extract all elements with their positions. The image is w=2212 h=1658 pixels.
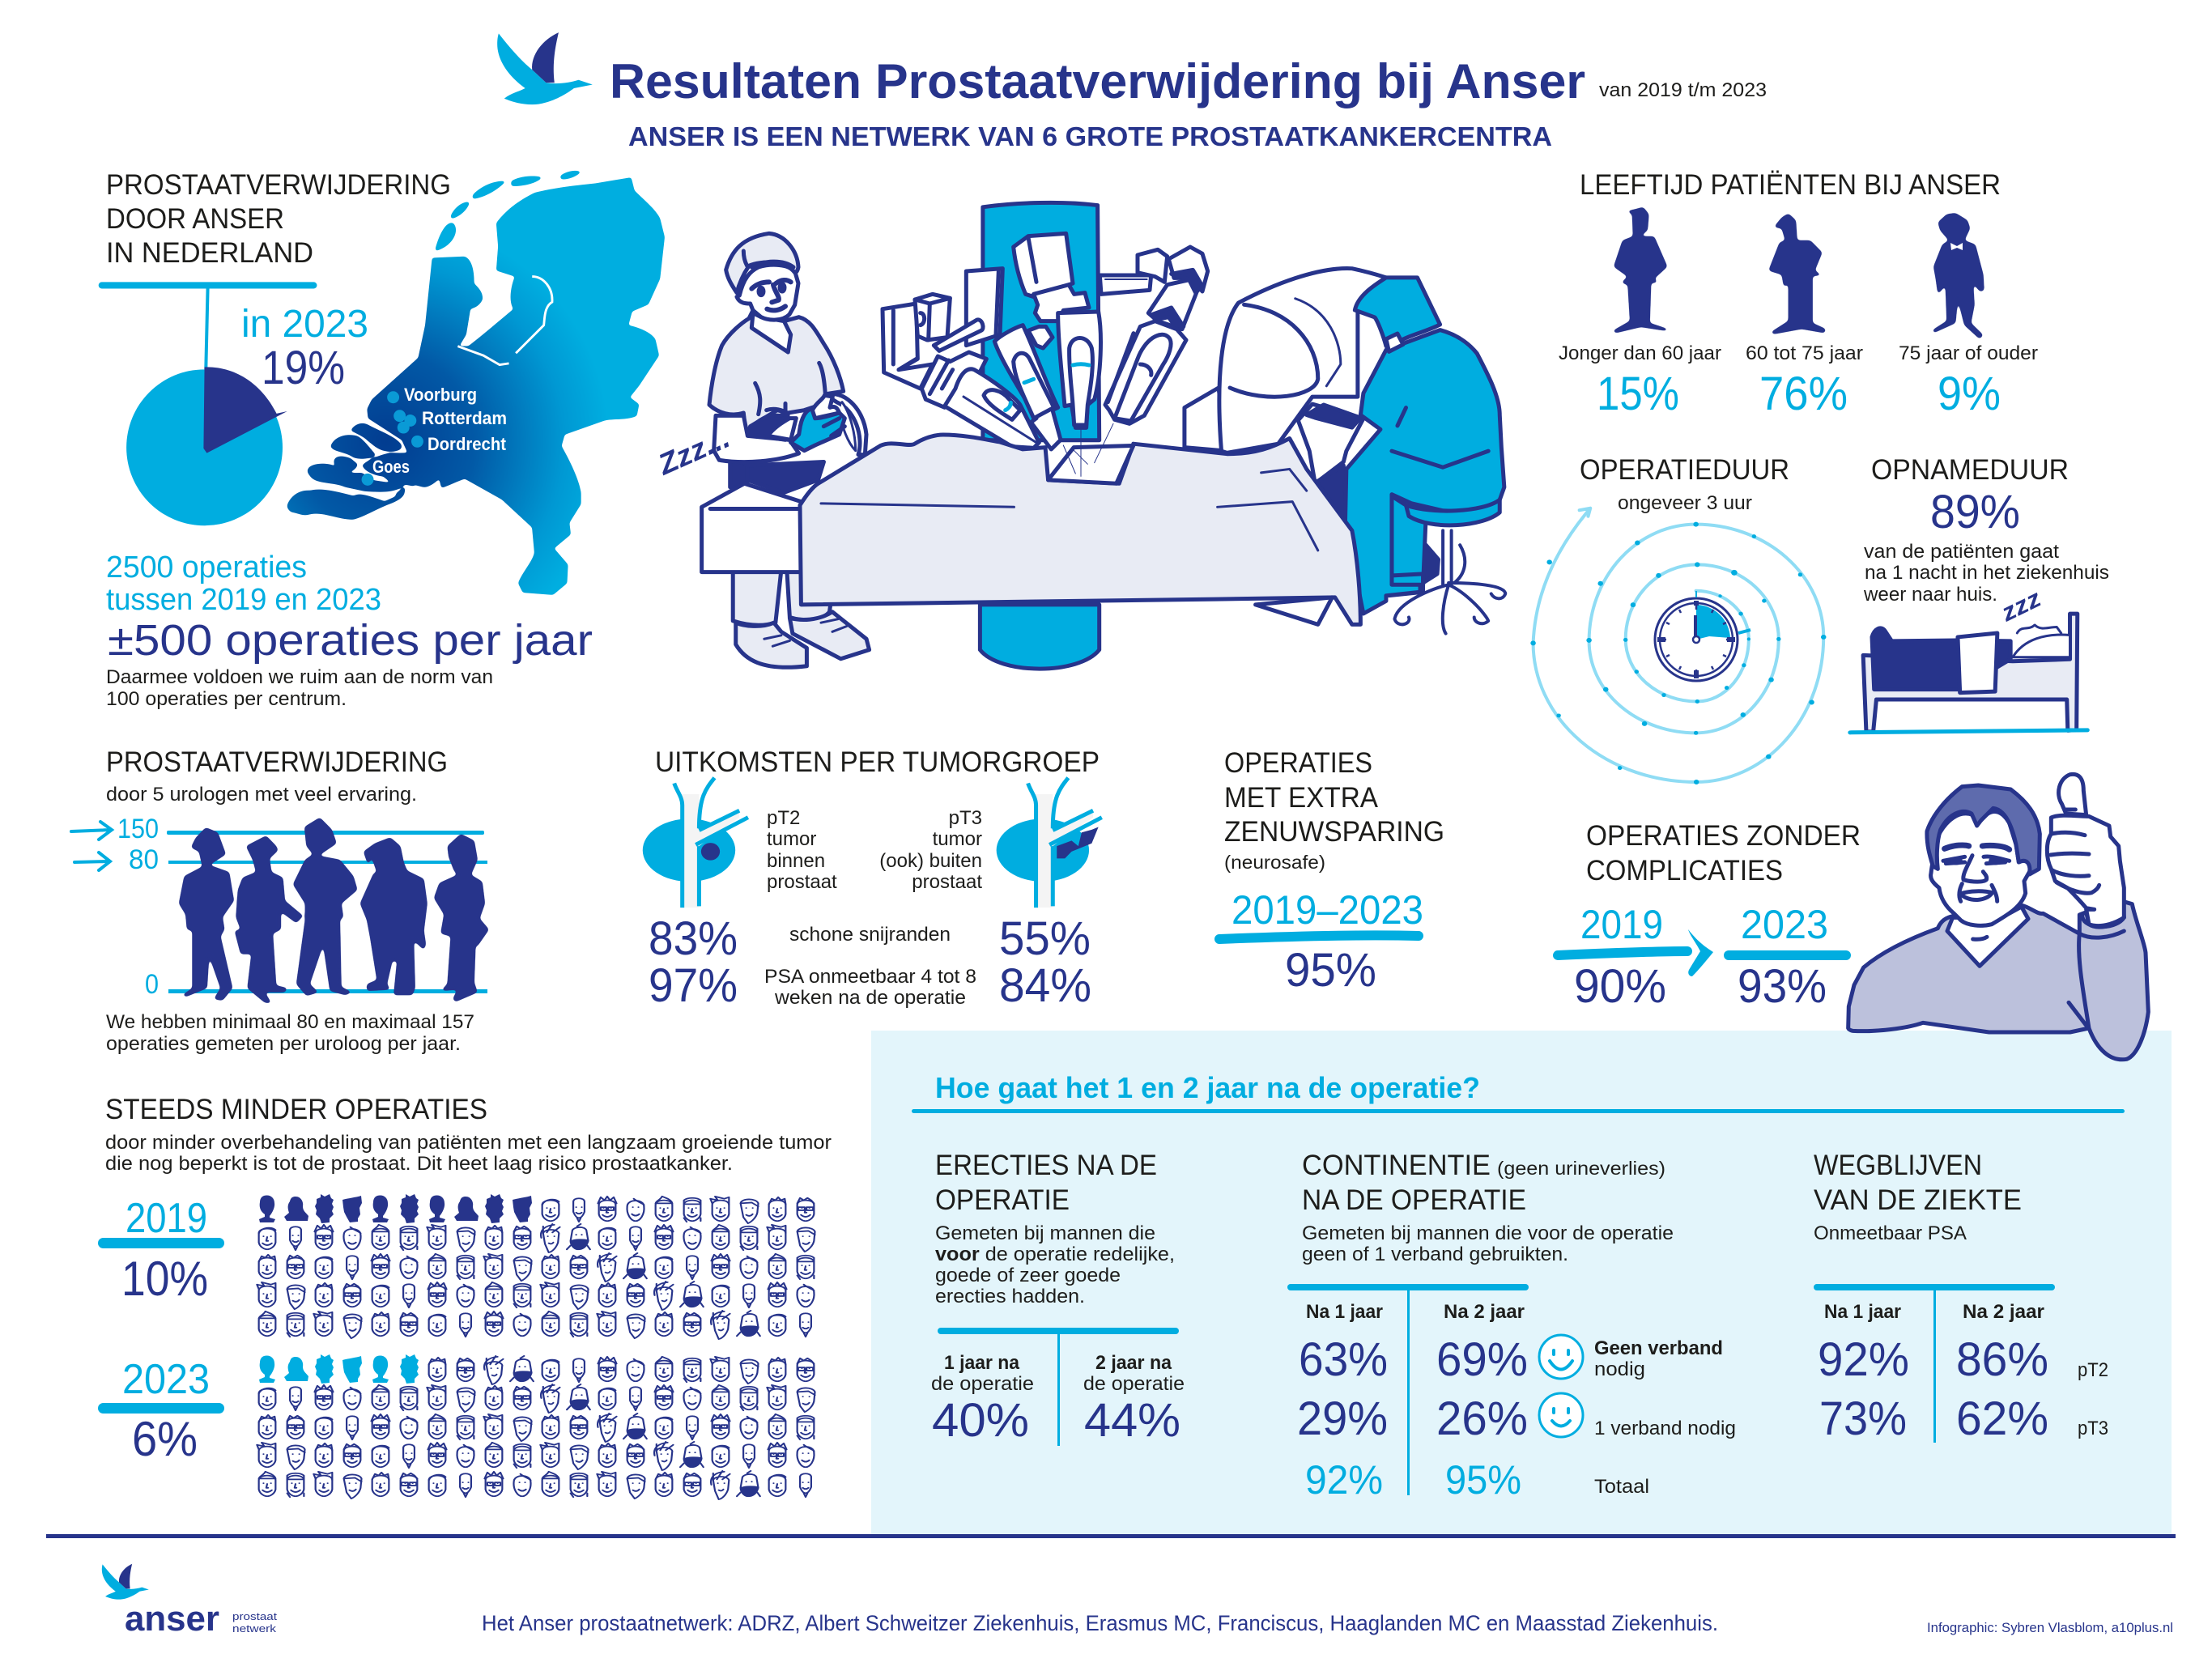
footer logo subtitle: prostaat	[232, 1610, 277, 1622]
pT2 label: prostaat	[767, 871, 837, 893]
footer logo subtitle	[232, 1610, 277, 1635]
heading: OPERATIES ZONDER	[1586, 820, 1861, 852]
map labels: Goes	[372, 457, 410, 477]
column labels	[931, 1352, 1185, 1395]
panel: staying free of disease	[1814, 1150, 2108, 1445]
footer rule	[46, 1534, 2176, 1538]
values	[932, 1394, 1180, 1447]
footer logo wordmark: anser	[125, 1599, 219, 1639]
value: 89%	[1930, 486, 2020, 538]
panel: prostatectomy in the Netherlands	[99, 169, 665, 710]
note: We hebben minimaal 80 en maximaal 157	[106, 1011, 474, 1033]
period: 2019–2023	[1231, 887, 1423, 933]
column labels: Na 2 jaar	[1444, 1301, 1525, 1323]
outcome values: 84%	[999, 959, 1091, 1012]
heading	[1302, 1150, 1526, 1216]
description: door minder overbehandeling van patiënten met een langzaam groeiende tumor	[105, 1132, 832, 1154]
icon: bow tie	[1950, 243, 1963, 250]
back layer: column, console, surgeon, stool, nurse legs	[730, 202, 1505, 669]
map labels: Rotterdam	[422, 408, 507, 428]
operations per year: ±500 operaties per jaar	[108, 616, 593, 665]
surgeon	[1298, 278, 1504, 614]
scale labels	[117, 814, 159, 1000]
footer logo subtitle: netwerk	[232, 1622, 277, 1635]
tumour labels: pT3	[2078, 1418, 2108, 1439]
panel: admission duration	[1850, 454, 2109, 733]
values: 69%	[1436, 1333, 1528, 1386]
heading: UITKOMSTEN PER TUMORGROEP	[655, 746, 1100, 778]
total values: 92%	[1305, 1457, 1383, 1503]
icon: small smiley	[1539, 1393, 1583, 1437]
nurse legs	[730, 451, 870, 667]
description: goede of zeer goede	[935, 1265, 1121, 1286]
icon: five urologists silhouettes	[179, 818, 489, 1003]
footer	[46, 1534, 2176, 1639]
network line: Het Anser prostaatnetwerk: ADRZ, Albert Schweitzer Ziekenhuis, Erasmus MC, Franciscus, Haaglanden MC en Maasstad Ziekenhuis.	[482, 1611, 1718, 1635]
subheading: door 5 urologen met veel ervaring.	[106, 784, 417, 806]
values: 73%	[1819, 1392, 1907, 1445]
description: voor de operatie redelijke,	[935, 1244, 1175, 1265]
values	[1818, 1333, 2048, 1445]
credit: Infographic: Sybren Vlasblom, a10plus.nl	[1927, 1620, 2173, 1635]
heading	[106, 169, 451, 269]
heading: VAN DE ZIEKTE	[1814, 1184, 2022, 1216]
title: Resultaten Prostaatverwijdering bij Anser	[610, 54, 1585, 108]
pie chart: 19 percent in 2023	[99, 282, 317, 525]
outcome values: 97%	[649, 959, 738, 1012]
panel: outcomes per tumour group	[643, 746, 1102, 1012]
note: operaties gemeten per uroloog per jaar.	[106, 1033, 461, 1055]
description: erecties hadden.	[935, 1286, 1085, 1307]
values: 26%	[1436, 1392, 1528, 1445]
age values	[1597, 368, 2001, 420]
pT3 label: (ook) buiten	[879, 850, 982, 872]
values: 90%	[1574, 960, 1666, 1013]
column labels: Na 2 jaar	[1963, 1301, 2044, 1323]
heading: OPERATIEDUUR	[1580, 454, 1789, 486]
operations count text	[106, 551, 381, 617]
total values	[1305, 1457, 1521, 1503]
2019 bar	[98, 1238, 224, 1248]
sleeping zzz: zzz	[1997, 585, 2045, 627]
bar and stem	[1287, 1284, 1529, 1495]
values: 92%	[1818, 1333, 1909, 1386]
heading: OPERATIES	[1224, 747, 1372, 779]
scale labels: 0	[145, 969, 159, 1000]
norm text: 100 operaties per centrum.	[106, 688, 347, 710]
map labels: Voorburg	[404, 385, 477, 405]
column labels: Na 1 jaar	[1306, 1301, 1383, 1323]
age labels: Jonger dan 60 jaar	[1559, 342, 1721, 364]
legends: nodig	[1594, 1358, 1645, 1380]
legends: Totaal	[1594, 1476, 1649, 1498]
outcome labels: weken na de operatie	[774, 987, 966, 1009]
column labels	[1306, 1301, 1525, 1323]
nurse upper body	[709, 233, 866, 462]
pT3 label: tumor	[933, 828, 982, 850]
description: geen of 1 verband gebruikten.	[1302, 1244, 1568, 1265]
norm text: Daarmee voldoen we ruim aan de norm van	[106, 666, 493, 688]
map of the Netherlands	[287, 171, 665, 595]
pT2 label: tumor	[767, 828, 816, 850]
heading	[1586, 820, 1861, 886]
2019 year: 2019	[125, 1195, 207, 1242]
panel: light blue follow-up background	[871, 1031, 2172, 1535]
norm text	[106, 666, 493, 710]
illustration: robotic surgery scene	[702, 202, 1505, 669]
panel: follow-up heading	[912, 1071, 2125, 1113]
age values: 15%	[1597, 368, 1679, 420]
panel: operations without complications	[1558, 820, 1861, 1013]
pie label year: in 2023	[241, 303, 368, 346]
heading: DOOR ANSER	[106, 203, 284, 235]
heading: ZENUWSPARING	[1224, 816, 1444, 848]
age labels: 60 tot 75 jaar	[1746, 342, 1863, 364]
pT3 label: pT3	[949, 807, 982, 829]
description	[1302, 1222, 1674, 1265]
values	[1574, 960, 1827, 1013]
robot column	[980, 202, 1100, 669]
heading: PROSTAATVERWIJDERING	[106, 169, 451, 201]
heading: WEGBLIJVEN	[1814, 1150, 1982, 1181]
panel: erections after surgery	[931, 1150, 1185, 1447]
arrow chevron	[1688, 929, 1713, 976]
icon: three men silhouettes	[1612, 207, 1984, 339]
map labels: Dordrecht	[428, 434, 507, 454]
operations count text: 2500 operaties	[106, 551, 307, 585]
values	[1297, 1333, 1528, 1445]
pictogram: 2023 patients	[257, 1354, 815, 1499]
values: 40%	[932, 1394, 1029, 1447]
heading: COMPLICATIES	[1586, 855, 1783, 886]
scale labels: 80	[129, 844, 159, 875]
outcome values: 55%	[999, 912, 1091, 965]
heading	[935, 1150, 1157, 1216]
age labels	[1559, 342, 2038, 364]
tumour labels: pT2	[2078, 1359, 2108, 1381]
values: 93%	[1738, 960, 1827, 1013]
column labels	[1824, 1301, 2044, 1323]
outcome labels: schone snijranden	[789, 924, 951, 946]
text: van de patiënten gaat	[1864, 541, 2059, 563]
description: Onmeetbaar PSA	[1814, 1222, 1967, 1244]
column labels: 2 jaar na	[1095, 1352, 1172, 1374]
bar and stem	[1814, 1284, 2055, 1443]
panel: continence after surgery	[1287, 1150, 1736, 1503]
panel: operation duration	[1530, 454, 1826, 784]
map labels	[372, 385, 507, 477]
age values: 9%	[1938, 368, 2001, 420]
heading: PROSTAATVERWIJDERING	[106, 746, 448, 778]
scale labels: 150	[117, 814, 159, 844]
heading: NA DE OPERATIE	[1302, 1184, 1526, 1216]
outcome values	[649, 912, 1091, 1012]
bar and stem	[938, 1328, 1179, 1446]
duration text: ongeveer 3 uur	[1618, 492, 1752, 514]
column labels: de operatie	[931, 1373, 1034, 1395]
operations count text: tussen 2019 en 2023	[106, 583, 381, 617]
icon: big smiley	[1539, 1335, 1583, 1379]
pT2 label	[767, 807, 837, 893]
icon: prostate with pT2 tumour	[643, 778, 748, 908]
spiral around clock	[1530, 508, 1826, 784]
value: 95%	[1285, 944, 1376, 997]
note	[106, 1011, 474, 1055]
values: 86%	[1956, 1333, 2048, 1386]
robot arms	[883, 233, 1208, 449]
age labels: 75 jaar of ouder	[1899, 342, 2038, 364]
heading: OPERATIE	[935, 1184, 1070, 1216]
text: na 1 nacht in het ziekenhuis	[1865, 562, 2109, 584]
description: Gemeten bij mannen die	[935, 1222, 1155, 1244]
icon: clock	[1655, 591, 1750, 681]
arrow 80	[74, 852, 110, 870]
outcome values: 83%	[649, 912, 738, 965]
neurosafe: (neurosafe)	[1224, 852, 1325, 873]
description	[935, 1222, 1175, 1307]
header: logo and title	[497, 32, 1767, 151]
2019 value: 10%	[121, 1252, 208, 1306]
heading: CONTINENTIE	[1302, 1150, 1491, 1181]
years	[1580, 902, 1828, 947]
tumour labels	[2078, 1359, 2108, 1439]
description: die nog beperkt is tot de prostaat. Dit heet laag risico prostaatkanker.	[105, 1153, 733, 1175]
2023 bar	[98, 1403, 224, 1414]
illustration: man giving thumbs up	[1848, 774, 2148, 1060]
heading: LEEFTIJD PATIËNTEN BIJ ANSER	[1580, 169, 2001, 201]
panel: fewer operations	[98, 1094, 832, 1499]
years: 2019	[1580, 902, 1663, 947]
heading: STEEDS MINDER OPERATIES	[105, 1094, 487, 1125]
years: 2023	[1741, 902, 1828, 947]
values: 62%	[1956, 1392, 2048, 1445]
heading: ERECTIES NA DE	[935, 1150, 1157, 1181]
icon: Anser bird logo	[497, 32, 593, 104]
legends: 1 verband nodig	[1594, 1418, 1736, 1439]
values: 44%	[1084, 1394, 1180, 1447]
icon: footer bird logo	[102, 1564, 149, 1600]
pictogram: 2019 patients	[257, 1194, 815, 1339]
instrument needles	[1063, 423, 1113, 476]
pie label value: 19%	[262, 342, 345, 394]
pT3 label	[879, 807, 982, 893]
description	[105, 1132, 832, 1175]
text	[1863, 541, 2109, 606]
heading note: (geen urineverlies)	[1497, 1158, 1665, 1179]
age values: 76%	[1759, 368, 1848, 420]
column labels: de operatie	[1083, 1373, 1185, 1395]
panel: patient age	[1559, 169, 2038, 420]
legends: Geen verband	[1594, 1337, 1723, 1359]
scale lines	[167, 831, 487, 993]
text: weer naar huis.	[1863, 584, 1997, 606]
panel: prostatectomy by urologists	[71, 746, 489, 1055]
icon: prostate with pT3 tumour	[997, 778, 1102, 908]
outcome labels: PSA onmeetbaar 4 tot 8	[764, 966, 976, 988]
heading rule	[912, 1109, 2125, 1113]
side box and operating table drape	[702, 435, 1360, 624]
pT3 label: prostaat	[912, 871, 982, 893]
heading	[1224, 747, 1444, 848]
icon: patient asleep in bed	[1850, 614, 2087, 733]
total values: 95%	[1445, 1457, 1521, 1503]
pT2 label: binnen	[767, 850, 825, 872]
2023 value: 6%	[132, 1412, 198, 1466]
outcome labels	[764, 924, 976, 1009]
heading: OPNAMEDUUR	[1871, 454, 2069, 486]
bars	[1558, 951, 1846, 955]
values: 29%	[1297, 1392, 1388, 1445]
heading: MET EXTRA	[1224, 782, 1379, 814]
heading	[1814, 1150, 2022, 1216]
2023 year: 2023	[122, 1356, 210, 1403]
arrow 150	[71, 822, 112, 840]
map waterways and city dots	[362, 277, 552, 486]
column labels: 1 jaar na	[944, 1352, 1020, 1374]
subtitle: ANSER IS EEN NETWERK VAN 6 GROTE PROSTAATKANKERCENTRA	[628, 121, 1552, 151]
heading: Hoe gaat het 1 en 2 jaar na de operatie?	[935, 1071, 1480, 1104]
title period: van 2019 t/m 2023	[1599, 79, 1767, 101]
values: 63%	[1299, 1333, 1388, 1386]
stool	[1394, 530, 1505, 634]
panel: extra nerve sparing	[1219, 747, 1444, 997]
column labels: Na 1 jaar	[1824, 1301, 1901, 1323]
bar	[1219, 935, 1419, 939]
legends	[1594, 1337, 1736, 1498]
heading: IN NEDERLAND	[106, 237, 313, 269]
pT2 label: pT2	[767, 807, 800, 829]
description: Gemeten bij mannen die voor de operatie	[1302, 1222, 1674, 1244]
sleeping zzz by nurse: Zzz...	[653, 420, 734, 482]
console	[1185, 269, 1386, 453]
